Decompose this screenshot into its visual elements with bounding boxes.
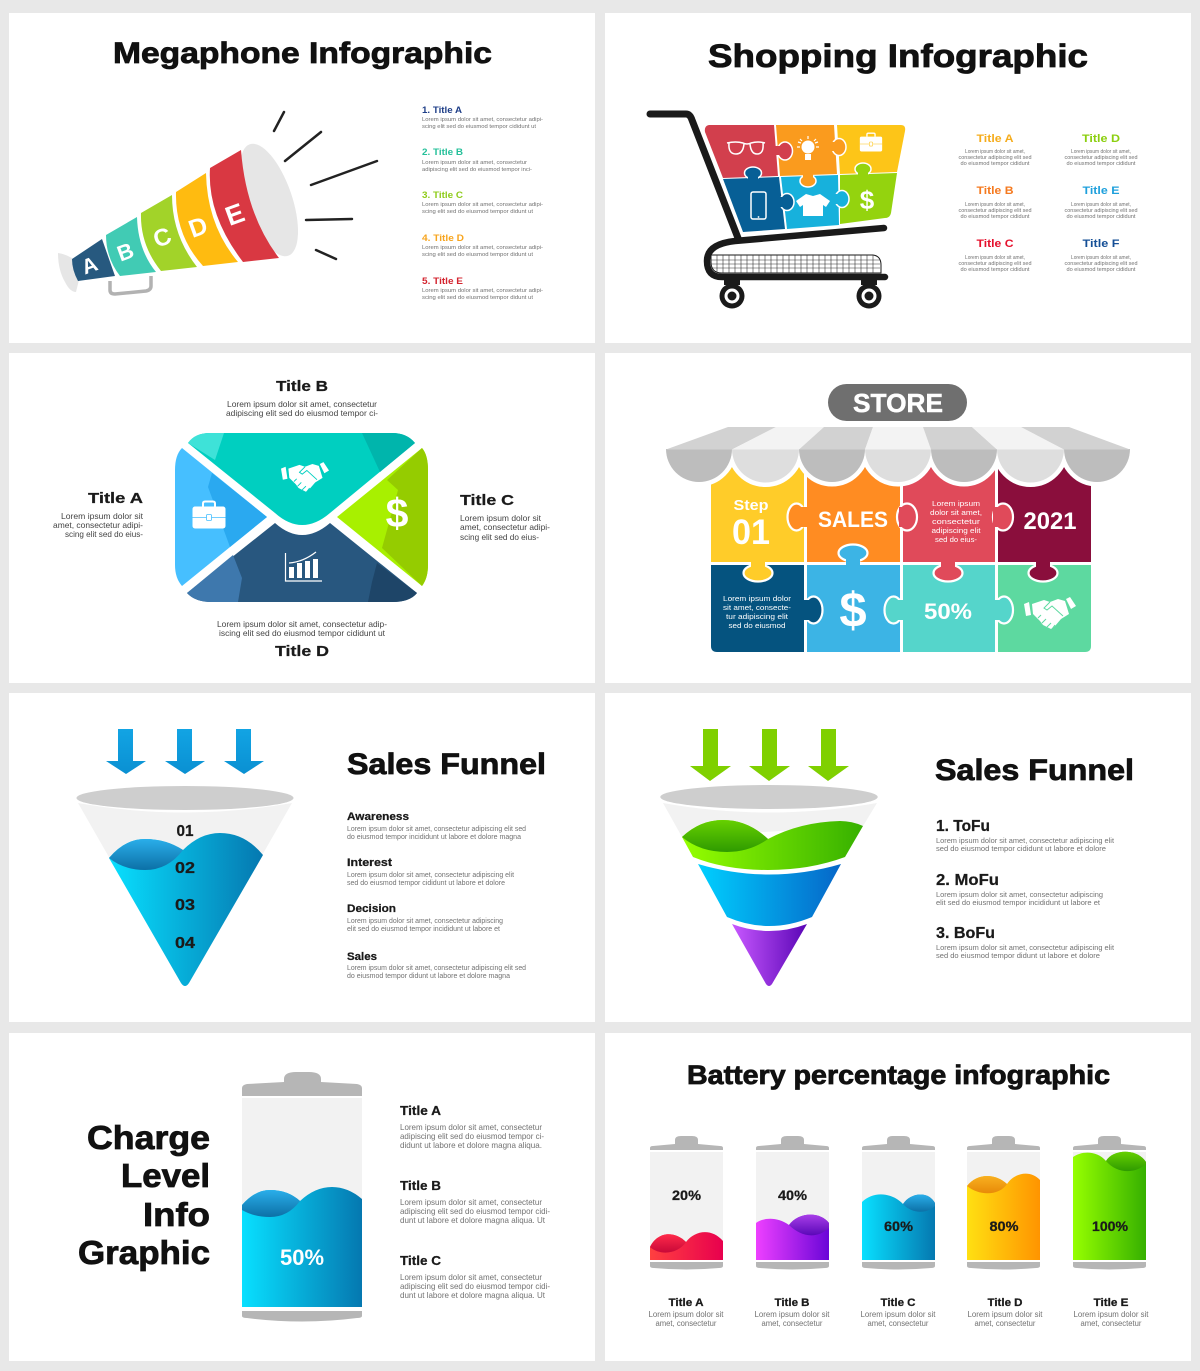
text block: funnel stages: sed do eiusmod tempor cididunt ut labore et dolore [936,846,1106,853]
icon: handshake [281,462,329,492]
text block: Title D: Title D [275,643,329,660]
text block: battery titles: amet, consectetur [656,1319,717,1328]
title: Sales Funnel: Sales Funnel [935,754,1134,787]
text block: titles: dunt ut labore et dolore magna aliqua. Ut [400,1290,546,1300]
text block: titles [400,1103,550,1300]
text block: titles: adipiscing elit sed do eiusmod tempor ci- [400,1131,544,1141]
title: Charge Level Info Graphic: Level [121,1157,210,1194]
battery: 60%: 60% [884,1218,914,1234]
text block: Title A [53,490,144,539]
text block: shopping titles: do eiusmod tempor cididunt [960,161,1030,167]
icon: t-shirt [796,194,830,216]
text block: Title B [226,378,378,418]
text block: funnel stages: Decision [347,903,396,915]
text block: shopping titles: Title C [976,238,1014,250]
icon: dollar: $ [839,584,867,638]
title: Battery percentage infographic: Battery percentage infographic [687,1060,1110,1090]
text block: shopping titles: Title E [1082,185,1120,197]
text block: red piece: consectetur [932,517,981,526]
text block: funnel stages: Lorem ipsum dolor sit amet, consectetur adipiscing elit sed [347,826,526,833]
icon: light bulb [797,136,819,160]
text block: funnel stages: 1. ToFu [936,818,990,835]
text block: shopping titles: consectetur adipiscing elit sed [1064,261,1138,267]
text block: funnel stages: Lorem ipsum dolor sit amet, consectetur adipiscing elit sed [347,965,526,972]
text block: battery titles: amet, consectetur [868,1319,929,1328]
text block: navy piece: Lorem ipsum dolor [723,594,792,603]
battery: 80%: 80% [990,1218,1019,1234]
text block: shopping titles: consectetur adipiscing elit sed [1064,208,1138,214]
text block: navy piece: tur adipiscing elit [726,612,789,621]
text block: shopping titles: Lorem ipsum dolor sit amet, [965,149,1025,155]
text block: shopping titles: do eiusmod tempor cididunt [960,267,1030,273]
text block: shopping titles: do eiusmod tempor cididunt [1066,214,1136,220]
text block: shopping titles: Title D [1082,133,1120,145]
panel: battery percentage [605,1033,1191,1361]
puzzle grid [711,465,1091,652]
panel: store puzzle [605,353,1191,683]
battery: 20%: 20% [672,1187,702,1203]
text block: megaphone titles: adipiscing elit sed do eiusmod tempor inci- [422,167,532,173]
icon: megaphone: B [114,237,137,266]
title: Charge Level Info Graphic: Info [143,1196,210,1233]
text block: funnel stages [347,811,526,980]
battery: 40%: 40% [778,1187,808,1203]
label: Step 01 [732,497,770,552]
text block: megaphone titles: Lorem ipsum dolor sit amet, consectetur [422,160,527,166]
text block: funnel stages: 2. MoFu [936,872,999,889]
text block: Title C: scing elit sed do eius- [460,532,539,542]
text block: megaphone titles: 4. Title D [422,233,465,243]
text block: titles: didunt ut labore et dolore magna aliqua. [400,1140,542,1150]
text block: shopping titles: consectetur adipiscing elit sed [1064,155,1138,161]
icon: dollar: $ [860,185,875,215]
text block: shopping titles: do eiusmod tempor cididunt [1066,267,1136,273]
funnel numbers: 04 [175,935,195,952]
text block: red piece: adipiscing elit [932,526,981,535]
text block: megaphone titles: 5. Title E [422,276,463,286]
battery: 40% [756,1136,829,1270]
text block: funnel stages: Sales [347,951,377,963]
text block: shopping titles: do eiusmod tempor cididunt [960,214,1030,220]
text block: shopping titles: Lorem ipsum dolor sit amet, [1071,149,1131,155]
funnel [660,785,878,986]
text block: shopping titles: Lorem ipsum dolor sit amet, [965,202,1025,208]
text block: funnel stages: Lorem ipsum dolor sit amet, consectetur adipiscing elit [936,838,1114,845]
text block: battery titles: amet, consectetur [1080,1319,1142,1328]
text block: funnel stages: Lorem ipsum dolor sit amet, consectetur adipiscing elit [347,872,514,879]
panel: sales funnel green [605,693,1191,1022]
text block: Title D: iscing elit sed do eiusmod tempor cididunt ut [219,628,386,638]
text block: battery titles: Title D [988,1297,1023,1309]
arrows [106,729,264,774]
text block: red piece [930,499,982,544]
text block: megaphone titles: Lorem ipsum dolor sit amet, consectetur adipi- [422,117,543,123]
text block: battery titles: Title E [1094,1297,1128,1309]
battery: 100%: 100% [1092,1218,1129,1234]
text block: funnel stages: elit sed do eiusmod tempor incididunt ut labore et [936,900,1100,907]
panel: sales funnel blue [9,693,595,1022]
text block: Title D: Lorem ipsum dolor sit amet, consectetur adip- [217,619,387,629]
text block: battery titles: Lorem ipsum dolor sit [860,1310,936,1319]
text block: Title D [217,619,387,660]
text block: funnel stages: elit sed do eiusmod tempor incididunt ut labore et [347,926,500,933]
title: Sales Funnel: Sales Funnel [347,748,546,781]
text block: funnel stages: 3. BoFu [936,925,995,942]
text block: megaphone titles: 3. Title C [422,190,464,200]
title: Charge Level Info Graphic [78,1119,210,1271]
text block: Title C: Title C [460,492,514,509]
text block: battery titles: Lorem ipsum dolor sit [968,1310,1043,1319]
panel: megaphone infographic [9,13,595,343]
icon: phone [751,192,766,219]
text block: titles: Title A [400,1103,442,1118]
text block: megaphone titles: scing elit sed do eiusmod tempor cididunt ut [422,124,536,130]
text block: funnel stages: do eiusmod tempor didunt ut labore et dolore magna [347,973,510,980]
text block: megaphone titles: Lorem ipsum dolor sit amet, consectetur adipi- [422,202,543,208]
text block: battery titles: amet, consectetur [974,1319,1036,1328]
battery: 60% [862,1136,935,1270]
arrows [690,729,849,781]
battery large [242,1072,362,1322]
text block: titles: Title B [400,1178,441,1193]
text block: shopping titles: do eiusmod tempor cididunt [1066,161,1136,167]
text block: red piece: Lorem ipsum [932,499,980,508]
text block: funnel stages: do eiusmod tempor incididunt ut labore et dolore magna [347,834,521,841]
label: 50%: 50% [280,1245,324,1270]
icon: megaphone: A [79,252,101,279]
text block: battery titles: amet, consectetur [762,1319,823,1328]
text block: titles: dunt ut labore et dolore magna aliqua. Ut [400,1215,546,1225]
icon: glasses [727,142,765,154]
text block: shopping titles: Lorem ipsum dolor sit amet, [965,255,1025,261]
text block: shopping titles: Lorem ipsum dolor sit amet, [1071,202,1131,208]
store sign [828,384,967,421]
text block: navy piece: sed do eiusmod [728,621,786,630]
text block: shopping titles [958,133,1138,273]
text block: megaphone titles: scing elit sed do eiusmod tempor didunt ut [422,252,533,258]
icon: briefcase [860,133,882,151]
title: Megaphone Infographic: Megaphone Infographic [113,37,492,70]
text block: shopping titles: consectetur adipiscing elit sed [958,261,1032,267]
store sign: STORE [853,388,943,418]
text block: shopping titles: Title A [976,133,1014,145]
title: Charge Level Info Graphic: Graphic [78,1234,210,1271]
text block: shopping titles: Lorem ipsum dolor sit amet, [1071,255,1131,261]
battery: 100% [1073,1136,1146,1270]
text block: Title C [460,492,550,542]
text block: battery titles: Lorem ipsum dolor sit [1074,1310,1149,1319]
text block: megaphone titles [422,105,543,301]
text block: battery titles [648,1297,1149,1328]
text block: shopping titles: consectetur adipiscing elit sed [958,155,1032,161]
funnel numbers [175,823,195,952]
icon: megaphone [58,137,310,294]
text block: navy piece: sit amet, consecte- [723,603,792,612]
text block: funnel stages: Lorem ipsum dolor sit amet, consectetur adipiscing elit [936,945,1114,952]
text block: Title B: Lorem ipsum dolor sit amet, consectetur [227,399,377,409]
battery: 80% [967,1136,1040,1270]
text block: megaphone titles: Lorem ipsum dolor sit amet, consectetur adipi- [422,288,543,294]
text block: navy piece [723,594,792,630]
text block: battery titles: Title A [668,1297,704,1309]
text block: titles: Lorem ipsum dolor sit amet, consectetur [400,1197,542,1207]
text block: Title A: Lorem ipsum dolor sit [61,511,144,521]
text block: funnel stages: Lorem ipsum dolor sit amet, consectetur adipiscing [347,918,503,925]
text block: megaphone titles: 2. Title B [422,147,464,157]
text block: titles: adipiscing elit sed do eiusmod tempor cidi- [400,1206,550,1216]
text block: battery titles: Lorem ipsum dolor sit [648,1310,724,1319]
icon: handshake [1024,597,1076,629]
battery: 20% [650,1136,723,1270]
funnel numbers: 01 [176,823,194,840]
text block: Title A: Title A [88,490,143,507]
label: 50%: 50% [924,599,972,624]
envelope diagram [175,433,428,602]
text block: Title A: amet, consectetur adipi- [53,520,143,530]
text block: Title C: amet, consectetur adipi- [460,522,550,532]
icon: megaphone: D [185,211,212,244]
icon: megaphone: C [150,222,175,254]
text block: funnel stages: sed do eiusmod tempor cididunt ut labore et dolore [347,880,505,887]
text block: Title B: adipiscing elit sed do eiusmod tempor ci- [226,408,378,418]
text block: titles: Lorem ipsum dolor sit amet, consectetur [400,1272,542,1282]
puzzle: cart contents [705,125,905,232]
text block: titles: Title C [400,1253,442,1268]
text block: shopping titles: consectetur adipiscing elit sed [958,208,1032,214]
panel: envelope infographic [9,353,595,683]
text block: Title C: Lorem ipsum dolor sit [460,513,542,523]
text block: red piece: dolor sit amet, [930,508,982,517]
label: SALES: SALES [818,507,888,532]
text block: funnel stages: Lorem ipsum dolor sit amet, consectetur adipiscing [936,892,1103,899]
awning [660,427,1136,482]
icon: dollar: $ [386,490,409,536]
text block: funnel stages: Interest [347,857,392,869]
title: Charge Level Info Graphic: Charge [87,1119,210,1156]
text block: battery titles: Title C [880,1297,916,1309]
label: Step 01: 01 [732,513,770,552]
text block: megaphone titles: 1. Title A [422,105,463,115]
text block: Title A: scing elit sed do eius- [65,529,143,539]
text block: shopping titles: Title B [976,185,1014,197]
text block: battery titles: Lorem ipsum dolor sit [754,1310,830,1319]
funnel [76,786,294,986]
funnel numbers: 02 [175,860,195,877]
funnel numbers: 03 [175,897,195,914]
text block: titles: Lorem ipsum dolor sit amet, consectetur [400,1122,542,1132]
text block: funnel stages [936,818,1114,960]
title: Shopping Infographic: Shopping Infographic [708,38,1088,74]
text block: titles: adipiscing elit sed do eiusmod tempor cidi- [400,1281,550,1291]
panel: shopping infographic [605,13,1191,343]
text block: shopping titles: Title F [1082,238,1120,250]
text block: megaphone titles: scing elit sed do eiusmod tempor didunt ut [422,295,533,301]
text block: red piece: sed do eius- [935,535,978,544]
icon: bar chart [286,552,322,581]
text block: funnel stages: sed do eiusmod tempor didunt ut labore et dolore [936,953,1100,960]
icon: sound rays [274,112,377,259]
label: 2021: 2021 [1024,508,1076,535]
icon: briefcase [192,502,226,528]
panel: charge level [9,1033,595,1361]
text block: battery titles: Title B [774,1297,810,1309]
text block: Title B: Title B [276,378,328,395]
text block: megaphone titles: Lorem ipsum dolor sit amet, consectetur adipi- [422,245,543,251]
label: Step 01: Step [734,497,768,514]
icon: megaphone: E [221,197,249,232]
text block: megaphone titles: scing elit sed do eiusmod tempor didunt ut [422,209,533,215]
text block: funnel stages: Awareness [347,811,409,823]
icon: shopping cart frame [650,114,885,308]
